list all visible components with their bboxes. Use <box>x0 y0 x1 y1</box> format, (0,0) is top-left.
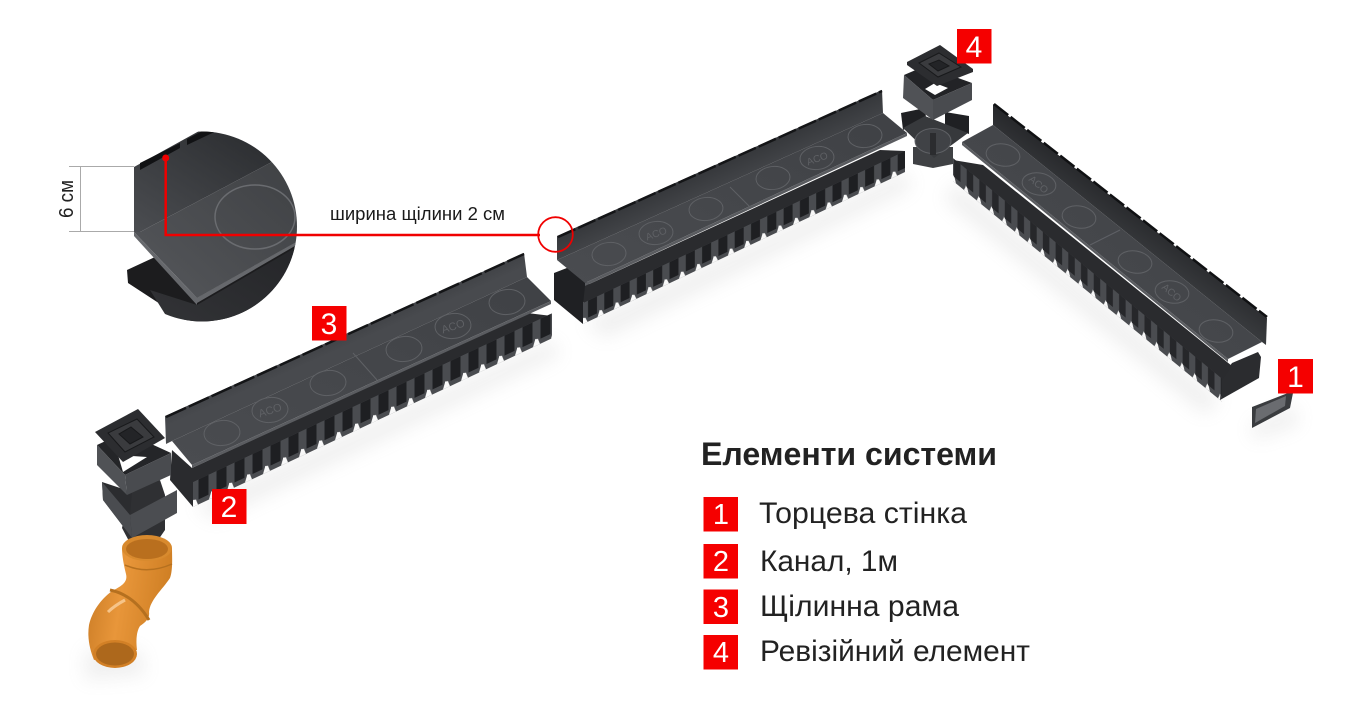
legend heading: Елементи системи <box>701 436 997 472</box>
inset magnifier detail <box>127 125 300 330</box>
channel ribs <box>953 158 1222 402</box>
slot width leader line <box>162 154 573 252</box>
end wall piece <box>1252 393 1293 428</box>
lower frame <box>102 482 132 538</box>
callout 2 <box>212 489 246 524</box>
legend item 3: 3 <box>713 592 729 624</box>
funnel plate <box>903 116 968 158</box>
orange elbow pipe <box>88 535 172 668</box>
callout 3 <box>312 306 346 341</box>
soft ground shadows <box>85 172 1298 680</box>
legend item 2: 2 <box>713 546 729 578</box>
upper frame <box>97 432 171 475</box>
channel body band <box>170 313 552 507</box>
cover <box>95 409 165 462</box>
callout 4 <box>957 29 992 64</box>
grating plate <box>172 277 551 465</box>
channel middle: ACO <box>805 150 830 168</box>
plate circles <box>984 141 1235 345</box>
slot width label: ширина щілини 2 см <box>330 204 505 224</box>
callout 2: 2 <box>221 491 237 524</box>
channel right: ACO <box>1159 282 1183 304</box>
ACO marks: ACO <box>644 225 669 243</box>
callout 4: 4 <box>966 31 982 64</box>
lower rail <box>127 242 296 322</box>
legend item 4: Ревізійний елемент <box>760 635 1030 668</box>
legend item 2: Канал, 1м <box>760 545 898 578</box>
ACO marks: ACO <box>1026 174 1050 196</box>
legend item 1: Торцева стінка <box>759 497 967 530</box>
funnel <box>122 480 165 543</box>
plate <box>134 150 300 298</box>
channel body band <box>953 160 1232 380</box>
plate circles <box>591 123 883 267</box>
legend item 2 <box>704 544 898 578</box>
dimension 6 cm <box>56 166 134 232</box>
channel end face <box>554 266 590 324</box>
callout 1 <box>1278 359 1313 394</box>
slotted wall <box>993 104 1267 345</box>
channel ribs <box>583 151 905 324</box>
circle recess <box>215 185 295 249</box>
callout 3: 3 <box>321 308 337 341</box>
channel right <box>953 104 1267 402</box>
slotted wall <box>165 253 527 444</box>
upper frame <box>904 66 972 100</box>
inspection element top <box>901 45 973 168</box>
lower frame back walls <box>901 108 926 130</box>
channel ribs <box>193 313 552 507</box>
legend item 4: 4 <box>713 637 729 669</box>
legend item 1: 1 <box>713 499 729 531</box>
channel left with slotted frame: ACO <box>440 317 467 336</box>
channel left with slotted frame <box>165 253 552 507</box>
grating plate <box>557 113 907 283</box>
plate circles <box>203 288 526 447</box>
inspection element bottom <box>95 409 177 543</box>
dimension 6 cm: 6 см <box>56 180 78 218</box>
channel middle <box>554 90 907 324</box>
callout 1: 1 <box>1287 361 1304 394</box>
channel end face <box>1220 352 1261 400</box>
grating plate <box>962 125 1262 359</box>
wall slots <box>140 143 180 170</box>
slotted wall <box>557 90 883 260</box>
funnel pipe <box>913 147 953 168</box>
ACO marks: ACO <box>257 401 284 420</box>
wall <box>134 132 272 232</box>
channel body band <box>583 150 905 305</box>
legend item 3: Щілинна рама <box>760 590 959 623</box>
cover <box>907 45 973 86</box>
